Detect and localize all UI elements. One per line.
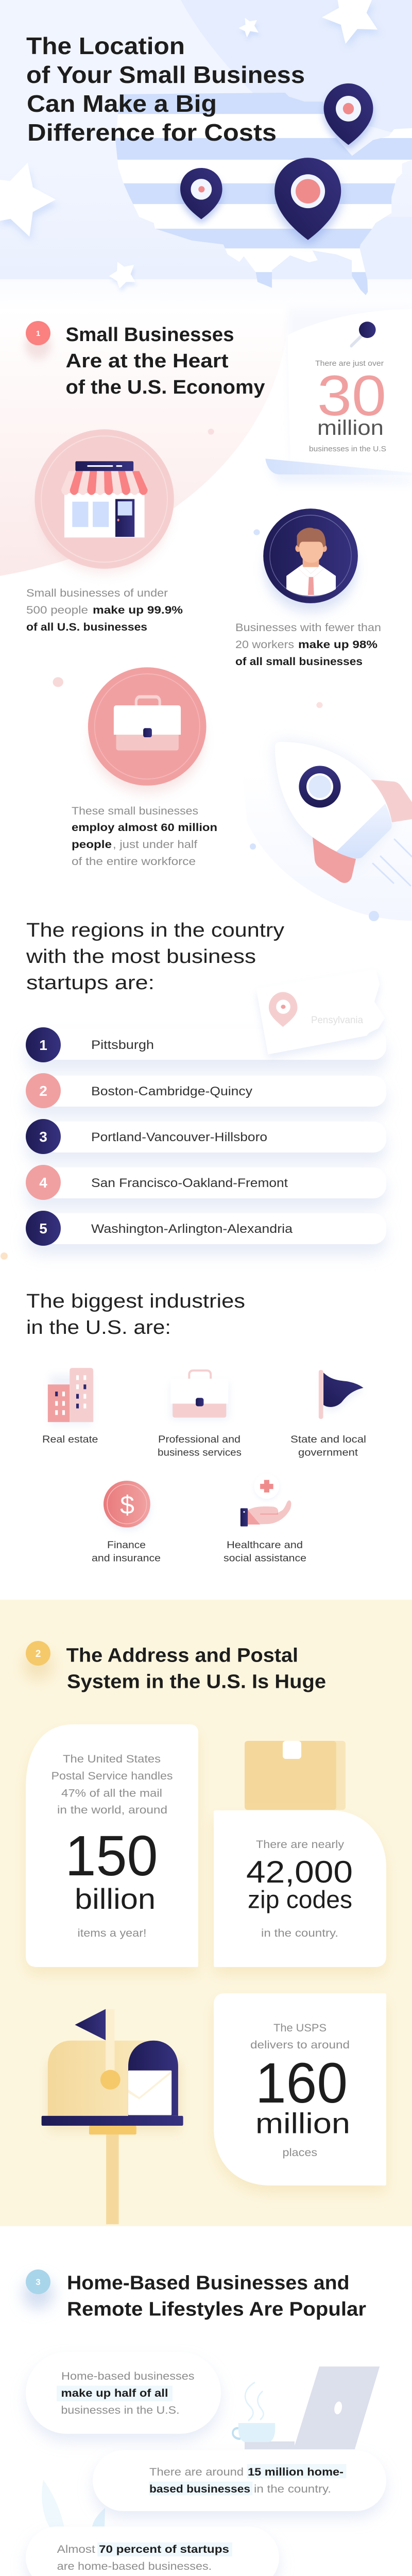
pill: 70 percent: are home-based businesses. bbox=[57, 2561, 212, 2572]
heading: regions: with the most business bbox=[26, 946, 256, 968]
icon: pin left bbox=[180, 168, 222, 224]
panel: regions list bbox=[1, 920, 386, 1260]
title: of Your Small Business bbox=[26, 61, 305, 88]
label: real estate: Real estate bbox=[42, 1434, 98, 1445]
card: 42,000 zip codes: in the country. bbox=[261, 1927, 338, 1939]
pill: half of all businesses: businesses in the U.S. bbox=[61, 2404, 179, 2416]
card: 160 million places: million bbox=[255, 2107, 350, 2140]
symbol: dollar sign: $ bbox=[120, 1490, 134, 1519]
heading: industries bbox=[26, 1291, 245, 1338]
row 4: San Francisco-Oakland-Fremont bbox=[91, 1176, 288, 1190]
title: Can Make a Big bbox=[27, 90, 217, 117]
label: government: State and local bbox=[290, 1434, 366, 1445]
heading: industries: The biggest industries bbox=[26, 1291, 245, 1312]
card: 150 billion items bbox=[26, 1724, 198, 1974]
row 5: Washington-Arlington-Alexandria bbox=[91, 1222, 293, 1236]
heading: postal system: The Address and Postal bbox=[66, 1645, 298, 1666]
heading: postal system: System in the U.S. Is Huge bbox=[67, 1671, 326, 1693]
heading: regions: startups are: bbox=[26, 972, 154, 994]
icon: buildings bbox=[48, 1368, 93, 1425]
row 2: 2 bbox=[39, 1083, 47, 1099]
text: 60 million people: people bbox=[72, 839, 112, 851]
card: 160 million places: The USPS bbox=[273, 2022, 327, 2034]
icon: small star bottom bbox=[109, 262, 136, 293]
panel: section 2 postal system bbox=[0, 1600, 412, 2226]
heading: regions bbox=[26, 920, 284, 994]
panel: biggest industries bbox=[26, 1291, 366, 1564]
label: professional services bbox=[158, 1434, 242, 1458]
label: healthcare bbox=[224, 1540, 306, 1564]
row 3: 3 bbox=[39, 1129, 47, 1145]
card: 42,000 zip codes bbox=[214, 1810, 386, 1974]
badge 2: 2 bbox=[36, 1649, 41, 1659]
row 4 bbox=[26, 1165, 386, 1200]
row 1: 1 bbox=[39, 1037, 47, 1053]
row shadows bbox=[26, 1038, 386, 1255]
text: fewer than 20 workers: 20 workers bbox=[235, 639, 294, 651]
card: 42,000 zip codes: 42,000 bbox=[246, 1855, 353, 1889]
row 4: 4 bbox=[39, 1175, 47, 1191]
icon: mailbox bbox=[42, 2009, 183, 2224]
icon: pin large bbox=[274, 158, 341, 245]
text: under 500 people: of all U.S. businesses bbox=[26, 621, 147, 633]
pill: 15 million bbox=[93, 2450, 386, 2518]
pill: 15 million: There are around bbox=[149, 2466, 244, 2478]
panel: hero bbox=[0, 0, 412, 315]
text: 60 million people: , just under half bbox=[113, 839, 197, 851]
card: 150 billion items: 150 bbox=[65, 1824, 158, 1888]
pill: 15 million: 15 million home- bbox=[248, 2466, 344, 2478]
icon: plant bbox=[42, 2480, 113, 2576]
title: Difference for Costs bbox=[27, 119, 277, 146]
map: striped United States bbox=[113, 91, 412, 298]
title bbox=[26, 32, 305, 146]
number 1: 1 bbox=[36, 329, 40, 338]
heading: postal system bbox=[66, 1645, 326, 1693]
label: professional services: Professional and bbox=[158, 1434, 241, 1445]
heading: small businesses bbox=[66, 324, 265, 398]
pill: 70 percent: Almost bbox=[57, 2544, 95, 2555]
stat: 30 million businesses: There are just over bbox=[315, 359, 384, 368]
heading: small businesses: Small Businesses bbox=[66, 324, 234, 346]
text: fewer than 20 workers: Businesses with fewer than bbox=[235, 622, 381, 634]
icon: briefcase circle bbox=[88, 667, 207, 792]
card: Pennsylvania map bbox=[256, 969, 385, 1059]
icon: dollar coin bbox=[104, 1481, 150, 1530]
label: government: government bbox=[298, 1448, 358, 1458]
text: 60 million people: These small businesses bbox=[72, 805, 198, 817]
icon: flag bbox=[319, 1370, 364, 1419]
label: healthcare: social assistance bbox=[224, 1553, 306, 1564]
heading: home-based: Home-Based Businesses and bbox=[67, 2272, 349, 2294]
card: 160 million places: 160 bbox=[255, 2052, 348, 2115]
row 3: Portland-Vancouver-Hillsboro bbox=[91, 1130, 267, 1144]
label: healthcare: Healthcare and bbox=[227, 1540, 303, 1551]
text: 60 million people: of the entire workforce bbox=[72, 856, 196, 868]
title: The Location bbox=[26, 32, 185, 59]
row 2 bbox=[26, 1073, 386, 1108]
row 5 bbox=[26, 1211, 386, 1246]
row 3 bbox=[26, 1119, 386, 1154]
text: under 500 people: 500 people bbox=[26, 604, 88, 616]
card: 160 million places: delivers to around bbox=[250, 2039, 350, 2051]
heading: home-based bbox=[67, 2272, 366, 2320]
panel: section 3 home-based bbox=[23, 2269, 412, 2576]
icon: hand with cross bbox=[241, 1473, 291, 1527]
icon: star left bbox=[0, 163, 57, 242]
card: 150 billion items: 47% of all the mail bbox=[61, 1788, 162, 1799]
card: 150 billion items: Postal Service handles bbox=[52, 1770, 173, 1782]
icon: person circle bbox=[263, 509, 358, 612]
stat: 30 million businesses: million bbox=[317, 416, 384, 439]
pill: half of all businesses bbox=[26, 2352, 221, 2442]
badge 3 bbox=[23, 2269, 54, 2309]
card: 150 billion items: in the world, around bbox=[57, 1804, 167, 1816]
panel: section 1 small businesses bbox=[0, 309, 412, 921]
label: finance: Finance bbox=[107, 1540, 146, 1551]
text: fewer than 20 workers bbox=[235, 622, 381, 668]
icon: small star top bbox=[238, 18, 260, 41]
card: 42,000 zip codes: There are nearly bbox=[256, 1839, 345, 1851]
label: finance bbox=[92, 1540, 161, 1564]
pill: half of all businesses: make up half of all bbox=[61, 2387, 168, 2399]
text: under 500 people: Small businesses of under bbox=[26, 587, 168, 599]
label: finance: and insurance bbox=[92, 1553, 161, 1564]
pill: 70 percent bbox=[26, 2527, 279, 2576]
label: professional services: business services bbox=[158, 1448, 242, 1458]
heading: small businesses: Are at the Heart bbox=[66, 350, 229, 372]
text: under 500 people bbox=[26, 587, 183, 633]
row 2: Boston-Cambridge-Quincy bbox=[91, 1084, 252, 1098]
heading: regions: The regions in the country bbox=[26, 920, 284, 941]
badge 1 shadow and circle bbox=[25, 321, 51, 359]
icon: storefront circle bbox=[35, 429, 174, 572]
icon: star top right bbox=[322, 0, 380, 49]
card: Pennsylvania map: Pensylvania bbox=[311, 1015, 363, 1026]
pill: half of all businesses: Home-based businesses bbox=[61, 2370, 195, 2382]
stat: 30 million businesses: 30 bbox=[317, 364, 386, 428]
pill: 15 million: in the country. bbox=[254, 2483, 331, 2495]
icon: small pin bbox=[351, 321, 376, 346]
row 5: 5 bbox=[39, 1221, 47, 1236]
text: 60 million people bbox=[72, 805, 217, 868]
pill: 15 million: based businesses bbox=[149, 2483, 250, 2495]
icon: pin right bbox=[324, 83, 373, 150]
label: government bbox=[290, 1434, 366, 1458]
stat: 30 million businesses bbox=[309, 359, 386, 453]
stat: 30 million businesses: businesses in the U.S bbox=[309, 445, 386, 453]
text: fewer than 20 workers: make up 98% bbox=[298, 639, 377, 651]
card: 150 billion items: The United States bbox=[63, 1753, 161, 1765]
icon: package bbox=[245, 1741, 346, 1810]
badge 3: 3 bbox=[36, 2277, 41, 2287]
card: 160 million places: places bbox=[282, 2147, 317, 2159]
card: 160 million places bbox=[214, 1993, 386, 2193]
icon: briefcase bbox=[170, 1370, 229, 1419]
card: 150 billion items: items a year! bbox=[77, 1927, 146, 1939]
heading: home-based: Remote Lifestyles Are Popular bbox=[67, 2299, 366, 2320]
row 1: Pittsburgh bbox=[91, 1038, 154, 1052]
text: 60 million people: employ almost 60 million bbox=[72, 822, 217, 834]
card: 42,000 zip codes: zip codes bbox=[248, 1887, 352, 1914]
pill: 70 percent: 70 percent of startups bbox=[99, 2544, 229, 2555]
text: fewer than 20 workers: of all small businesses bbox=[235, 656, 363, 668]
text: under 500 people: make up 99.9% bbox=[93, 604, 183, 616]
heading: small businesses: of the U.S. Economy bbox=[66, 377, 265, 398]
badge 2 bbox=[23, 1641, 54, 1681]
row 1 bbox=[26, 969, 386, 1062]
bar under stat panel bbox=[265, 459, 412, 475]
icon: laptop and coffee bbox=[233, 2366, 380, 2449]
heading: industries: in the U.S. are: bbox=[26, 1317, 171, 1338]
icon: rocket bbox=[250, 742, 412, 921]
background arc behind rocket bbox=[242, 773, 412, 921]
card: 150 billion items: billion bbox=[75, 1883, 156, 1915]
